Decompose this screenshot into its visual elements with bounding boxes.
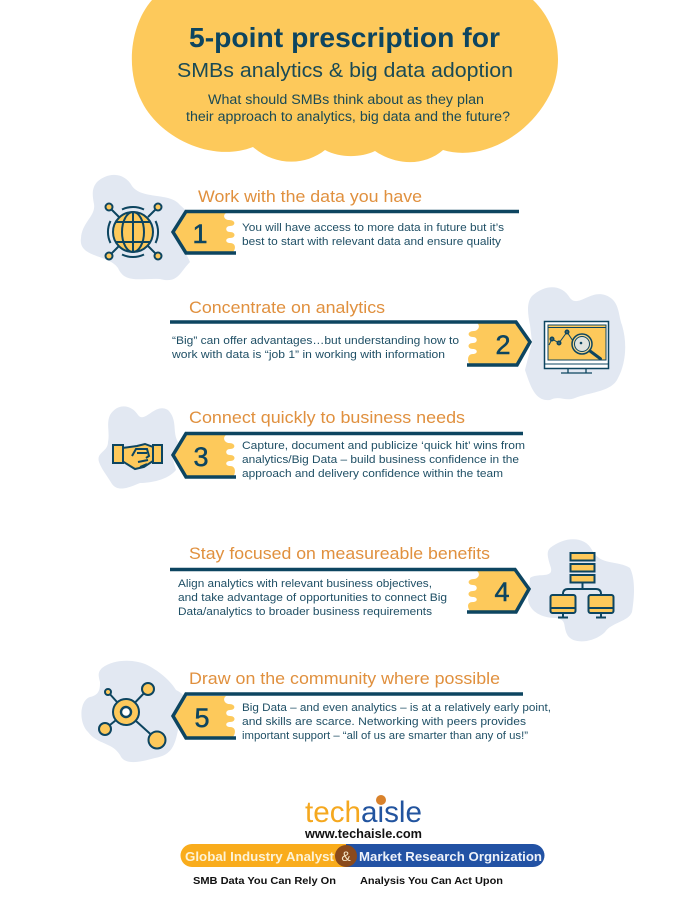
tag 2: 2 [495, 330, 511, 360]
footer logo: techaisle [305, 796, 422, 829]
tag 3 [173, 434, 523, 477]
body 5: and skills are scarce. Networking with peers provides [242, 716, 526, 728]
footer banner: Market Research Orgnization [359, 849, 542, 864]
tag 4 [170, 570, 529, 612]
heading 3: Connect quickly to business needs [189, 408, 465, 427]
footer banner [180, 844, 544, 867]
blob background 2 [525, 287, 625, 400]
body 3: analytics/Big Data – build business confidence in the [242, 454, 519, 466]
tag 2 [170, 322, 530, 365]
body 4: Data/analytics to broader business requirements [178, 606, 432, 618]
header cloud [132, 0, 558, 162]
panel: point 4 [170, 539, 634, 641]
body 5: Big Data – and even analytics – is at a relatively early point, [242, 702, 551, 714]
intro question: What should SMBs think about as they plan [208, 92, 484, 107]
panel: point 1 [81, 175, 519, 280]
logo ball [376, 795, 386, 805]
body 4: and take advantage of opportunities to connect Big [178, 592, 447, 604]
body 5: important support – “all of us are smarter than any of us!” [242, 730, 528, 742]
body 1: You will have access to more data in future but it’s [242, 222, 504, 234]
title: 5-point prescription for [189, 22, 500, 53]
tag 1: 1 [192, 219, 208, 249]
body 3: approach and delivery confidence within the team [242, 468, 503, 480]
icon: handshake [113, 444, 162, 469]
blob background 4 [528, 539, 634, 641]
title [177, 22, 513, 124]
heading 1: Work with the data you have [198, 187, 422, 206]
panel: point 3 [99, 406, 525, 489]
icon: server network [550, 553, 614, 618]
body 3: Capture, document and publicize ‘quick hit’ wins from [242, 440, 525, 452]
panel: point 5 [81, 661, 551, 762]
heading 5: Draw on the community where possible [189, 669, 500, 688]
blob background 3 [99, 406, 178, 489]
website: www.techaisle.com [304, 827, 422, 841]
tagline left: SMB Data You Can Rely On [193, 875, 336, 887]
footer banner: & [341, 848, 351, 864]
blob background 5 [81, 661, 185, 762]
body 2: work with data is “job 1” in working with information [171, 349, 445, 361]
icon: node graph [99, 683, 166, 748]
tagline right: Analysis You Can Act Upon [360, 875, 503, 887]
tag 5 [173, 694, 523, 738]
blob background 1 [81, 175, 190, 280]
intro question: their approach to analytics, big data and the future? [186, 109, 510, 124]
tag 1 [173, 212, 519, 253]
heading 4: Stay focused on measureable benefits [189, 544, 490, 563]
footer banner: Global Industry Analyst [185, 849, 335, 864]
body 2: “Big” can offer advantages…but understanding how to [172, 335, 459, 347]
tag 5: 5 [194, 703, 210, 733]
heading 2: Concentrate on analytics [189, 298, 385, 317]
subtitle: SMBs analytics & big data adoption [177, 60, 513, 82]
body 1: best to start with relevant data and ensure quality [242, 236, 501, 248]
tag 4: 4 [494, 577, 510, 607]
icon: globe [106, 204, 162, 260]
panel: point 2 [170, 287, 625, 400]
tag 3: 3 [193, 442, 209, 472]
icon: monitor with magnifier [544, 322, 608, 373]
body 4: Align analytics with relevant business objectives, [178, 578, 432, 590]
